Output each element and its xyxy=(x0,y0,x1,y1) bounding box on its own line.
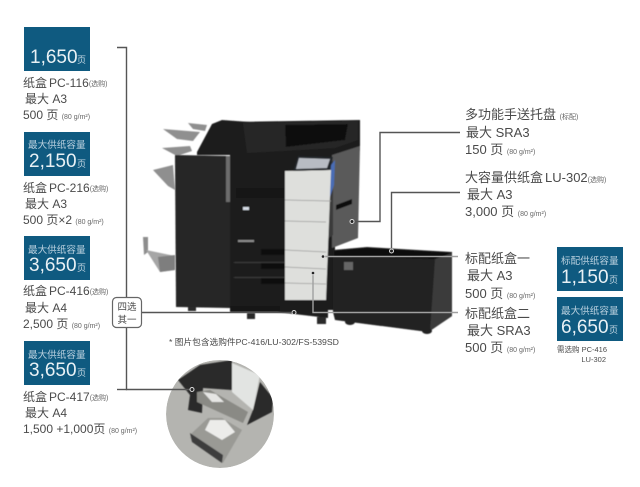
capacity box: 6,650 xyxy=(557,297,623,341)
capacity box: 1,150: 标配供纸容量 xyxy=(561,255,619,267)
spec: standard tray 2: 500 页 (80 g/m²) xyxy=(465,340,535,355)
capacity box: 1,650: 页 xyxy=(77,55,86,65)
badge: choose one of four: 其一 xyxy=(117,315,137,326)
spec: PC-416: 最大 A4 xyxy=(25,301,67,315)
spec: PC-116 xyxy=(23,75,107,122)
paper tray slots xyxy=(261,249,285,284)
spec: LU-302: 3,000 页 (80 g/m²) xyxy=(465,204,546,219)
spec: PC-216 xyxy=(23,180,108,227)
capacity box: 1,650 xyxy=(24,27,90,71)
main body xyxy=(230,120,360,310)
spec: PC-216: 500 页×2 (80 g/m²) xyxy=(23,213,104,227)
capacity box: 6,650: 最大供纸容量 xyxy=(561,305,619,317)
white front panels xyxy=(285,170,331,300)
right side panel xyxy=(332,146,360,248)
capacity box: 3,650 PC-416 xyxy=(24,236,90,280)
finisher trays xyxy=(153,123,207,190)
capacity box: 3,650 PC-416: 页 xyxy=(77,263,86,273)
spec: PC-216: 最大 A3 xyxy=(25,197,67,211)
capacity box: 2,150: 页 xyxy=(77,159,86,169)
spec: PC-416 xyxy=(23,283,108,331)
inset circle: tray detail xyxy=(166,360,274,468)
capacity box: 2,150 xyxy=(24,132,90,176)
capacity box: 2,150: 2,150 xyxy=(29,151,77,172)
spec: PC-116: 纸盒PC-116 xyxy=(23,76,89,90)
callout dots xyxy=(190,220,394,392)
capacity box: 6,650: 6,650 xyxy=(561,317,609,338)
spec: LU-302: 大容量供纸盒LU-302(选购) xyxy=(465,170,606,185)
spec: PC-416: 纸盒PC-416 xyxy=(23,284,90,298)
badge: choose one of four xyxy=(112,298,142,328)
note: requires options: LU-302 xyxy=(581,355,606,364)
touch panel xyxy=(293,156,333,171)
spec: PC-417: (选购) xyxy=(90,393,108,402)
sub tray xyxy=(143,237,175,272)
spec: PC-417 xyxy=(23,389,137,436)
spec: standard tray 1: 最大 A3 xyxy=(467,268,513,283)
spec: PC-417: 纸盒PC-417 xyxy=(23,390,90,404)
capacity box: 1,650: 1,650 xyxy=(30,47,78,68)
capacity box: 6,650: 页 xyxy=(609,325,618,335)
spec: standard tray 2 xyxy=(465,306,535,355)
spec: standard tray 1: 500 页 (80 g/m²) xyxy=(465,286,535,301)
capacity box: 3,650 PC-417: 页 xyxy=(77,368,86,378)
spec: PC-116: 500 页 (80 g/m²) xyxy=(23,108,90,122)
spec: bypass tray: 多功能手送托盘 (标配) xyxy=(465,107,578,122)
capacity box: 1,150: 1,150 xyxy=(561,267,609,288)
capacity box: 3,650 PC-417: 3,650 xyxy=(29,360,77,381)
capacity box: 3,650 PC-416: 3,650 xyxy=(29,255,77,276)
spec: standard tray 2: 最大 SRA3 xyxy=(467,323,531,338)
spec: PC-416: (选购) xyxy=(90,287,108,296)
spec: PC-416: 2,500 页 (80 g/m²) xyxy=(23,317,100,331)
spec: PC-417: 最大 A4 xyxy=(25,406,67,420)
footnote: * 图片包含选购件PC-416/LU-302/FS-539SD xyxy=(169,336,339,347)
badge: choose one of four: 四选 xyxy=(117,301,137,313)
note: requires options: 需选购 PC-416 xyxy=(557,344,607,354)
finisher body xyxy=(175,155,230,308)
spec: PC-417: 1,500 +1,000页 (80 g/m²) xyxy=(23,422,137,436)
capacity box: 2,150: 最大供纸容量 xyxy=(28,139,86,151)
capacity box: 1,150: 页 xyxy=(609,275,618,285)
spec: standard tray 2: 标配纸盒二 xyxy=(465,306,530,321)
logo on body xyxy=(243,207,249,210)
large capacity unit xyxy=(333,247,452,334)
spec: bypass tray: 最大 SRA3 xyxy=(466,125,530,140)
printer machine xyxy=(143,120,360,324)
finisher top xyxy=(197,120,250,155)
spec: PC-116: (选购) xyxy=(89,79,107,88)
capacity box: 3,650 PC-416: 最大供纸容量 xyxy=(28,244,86,256)
spec: standard tray 1: 标配纸盒一 xyxy=(465,251,530,266)
spec: PC-216: (选购) xyxy=(90,184,108,193)
note: requires options xyxy=(557,344,607,364)
spec: PC-116: 最大 A3 xyxy=(25,92,67,106)
capacity box: 3,650 PC-417: 最大供纸容量 xyxy=(28,349,86,361)
spec: LU-302 xyxy=(465,170,606,219)
spec: standard tray 1 xyxy=(465,251,535,301)
spec: bypass tray: 150 页 (80 g/m²) xyxy=(465,142,535,157)
connector lines: left bracket and callouts xyxy=(117,48,460,390)
capacity box: 1,150 xyxy=(557,247,623,291)
spec: LU-302: 最大 A3 xyxy=(467,187,513,202)
spec: bypass tray xyxy=(465,107,578,157)
capacity box: 3,650 PC-417 xyxy=(24,341,90,385)
spec: PC-216: 纸盒PC-216 xyxy=(23,181,90,195)
lower base xyxy=(277,300,328,318)
